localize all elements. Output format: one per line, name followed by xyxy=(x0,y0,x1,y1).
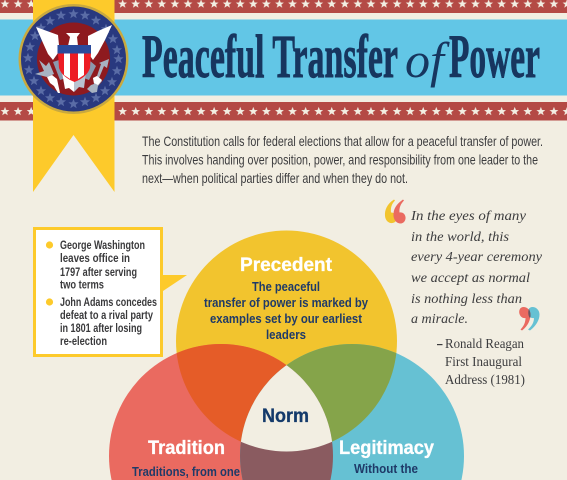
callout: precedent examples: two terms xyxy=(60,278,104,292)
callout: precedent examples: George Washington xyxy=(60,238,145,252)
precedent text xyxy=(204,255,369,342)
quote attribution: First Inaugural xyxy=(445,354,522,369)
quote text: is nothing less than xyxy=(411,291,522,306)
eagle wings xyxy=(36,27,59,60)
eagle body xyxy=(53,60,66,80)
title banner xyxy=(0,20,567,96)
talons and stem left xyxy=(47,75,60,93)
intro text xyxy=(142,133,543,186)
callout: precedent examples: defeat to a rival party xyxy=(60,308,153,322)
precedent text: The peaceful xyxy=(252,279,320,294)
icon: presidential seal xyxy=(18,4,128,114)
tradition text: Tradition xyxy=(148,438,225,459)
tradition text: Traditions, from one xyxy=(132,464,240,479)
venn diagram xyxy=(109,230,464,480)
callout: precedent examples: re-election xyxy=(60,334,107,348)
intro text: next—when political parties differ and when they do not. xyxy=(142,170,408,186)
precedent text: examples set by our earliest xyxy=(210,311,363,326)
precedent text: Precedent xyxy=(240,255,333,276)
olive branch xyxy=(35,60,54,77)
norm label: Norm xyxy=(262,406,309,427)
yellow ribbon xyxy=(33,0,114,192)
icon: closing quote mark xyxy=(519,307,540,330)
quote attribution: Address (1981) xyxy=(445,372,525,387)
precedent text: transfer of power is marked by xyxy=(204,295,369,310)
quote attribution: Ronald Reagan xyxy=(445,336,524,351)
quote text: we accept as normal xyxy=(411,270,530,285)
callout: precedent examples xyxy=(34,228,187,356)
callout: precedent examples: in 1801 after losing xyxy=(60,321,142,335)
quote text xyxy=(410,208,542,326)
quote text: in the world, this xyxy=(411,229,509,244)
arrows xyxy=(87,59,109,93)
header star stripe top xyxy=(0,0,567,13)
legitimacy text xyxy=(339,438,434,476)
quote text: every 4-year ceremony xyxy=(411,249,542,264)
icon: opening quote mark xyxy=(385,200,406,224)
legitimacy text: Legitimacy xyxy=(339,438,434,459)
callout: precedent examples: 1797 after serving xyxy=(60,265,137,279)
callout: precedent examples: John Adams concedes xyxy=(60,295,157,309)
callout: precedent examples: leaves office in xyxy=(60,251,130,265)
quote text: a miracle. xyxy=(411,311,468,326)
legitimacy text: Without the xyxy=(354,461,418,476)
tradition text xyxy=(132,438,240,479)
seal star ring xyxy=(23,9,124,108)
eagle head xyxy=(66,33,80,46)
quote text: In the eyes of many xyxy=(410,208,526,223)
title: of xyxy=(405,32,450,88)
header star stripe bottom xyxy=(0,102,567,120)
quote attribution xyxy=(437,336,525,387)
precedent text: leaders xyxy=(266,327,306,342)
shield xyxy=(58,45,91,82)
